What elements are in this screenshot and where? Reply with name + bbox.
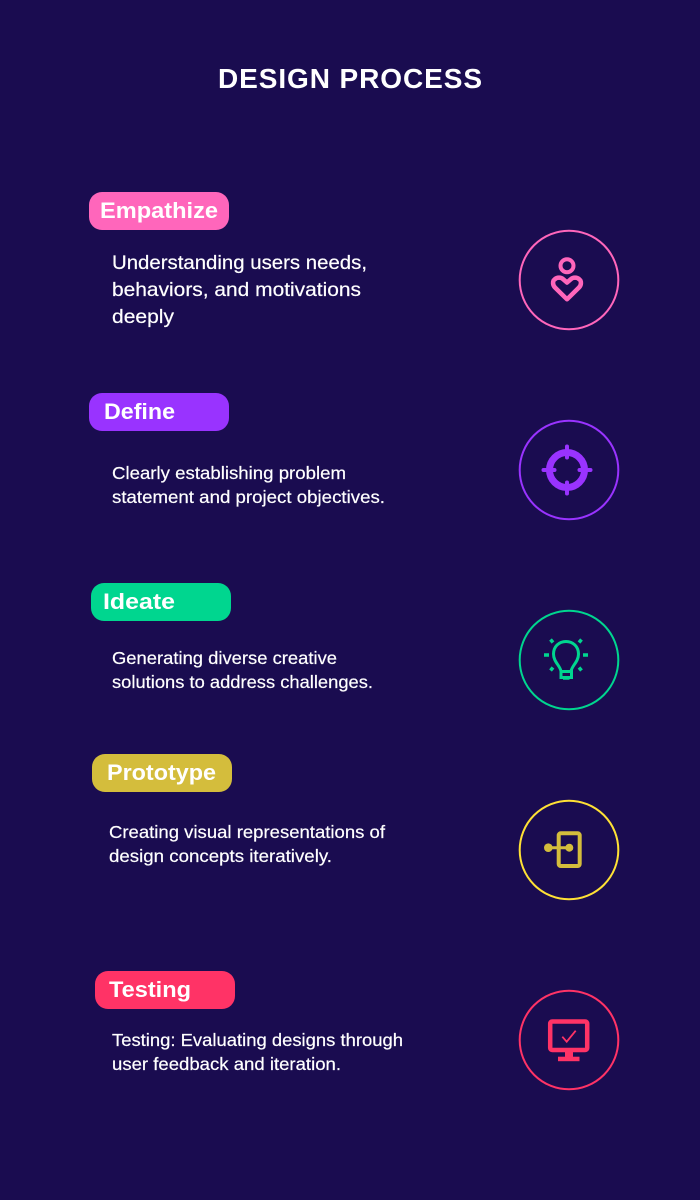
panel: Prototype — [92, 754, 618, 899]
title: DESIGN PROCESS — [218, 63, 482, 94]
text: Define description: statement and project objectives. — [112, 487, 385, 507]
heading: Testing: Testing — [109, 977, 191, 1002]
text: Prototype description: design concepts iteratively. — [109, 846, 332, 866]
heading: Define — [89, 393, 229, 431]
heading: Ideate: Ideate — [103, 589, 175, 614]
heading: Ideate — [91, 583, 231, 621]
icon: light bulb — [520, 611, 618, 709]
text: Empathize description: deeply — [112, 306, 174, 328]
panel: Define — [89, 393, 618, 519]
text: Define description: Clearly establishing problem — [112, 463, 346, 483]
text: Ideate description: solutions to address challenges. — [112, 672, 373, 692]
panel: Ideate — [91, 583, 618, 709]
text: Testing description: user feedback and iteration. — [112, 1054, 341, 1074]
panel: Empathize — [89, 192, 618, 329]
heading: Prototype — [92, 754, 232, 792]
text: Ideate description — [112, 648, 373, 692]
text: Testing description: Testing: Evaluating designs through — [112, 1030, 403, 1050]
text: Empathize description: Understanding users needs, — [112, 252, 367, 274]
heading: Testing — [95, 971, 235, 1009]
icon: person with heart — [520, 231, 618, 329]
icon: door with connector — [520, 801, 618, 899]
text: Ideate description: Generating diverse creative — [112, 648, 337, 668]
text: Define description — [112, 463, 385, 507]
icon: crosshair target — [520, 421, 618, 519]
text: Prototype description: Creating visual representations of — [109, 822, 385, 842]
text: Prototype description — [109, 822, 385, 866]
panel: Testing — [95, 971, 618, 1089]
heading: Empathize: Empathize — [100, 198, 218, 223]
icon: monitor with check — [520, 991, 618, 1089]
heading: Prototype: Prototype — [107, 760, 216, 785]
heading: Define: Define — [104, 399, 175, 424]
text: Testing description — [112, 1030, 403, 1074]
heading: Empathize — [89, 192, 229, 230]
text: Empathize description: behaviors, and motivations — [112, 279, 361, 301]
text: Empathize description — [112, 252, 367, 328]
